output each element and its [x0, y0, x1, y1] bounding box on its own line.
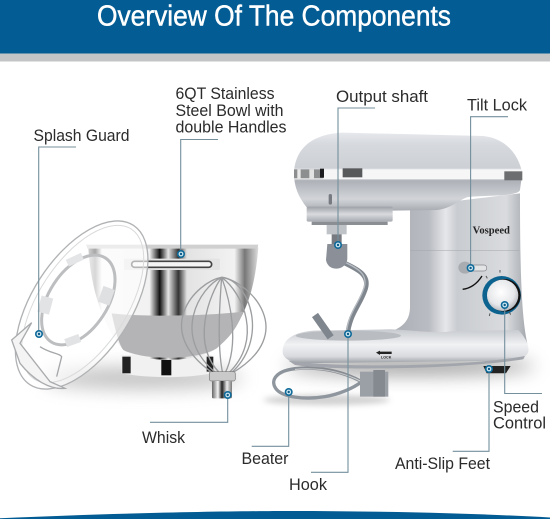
beater connector: [360, 370, 388, 397]
callout: whisk: [142, 391, 232, 447]
beater loop: [274, 368, 362, 398]
bowl lower reflection: [112, 312, 243, 358]
whisk illustration: [182, 277, 266, 398]
whisk shaft: [212, 381, 232, 398]
label: Tilt Lock: [467, 97, 528, 115]
anti-slip foot: [483, 366, 511, 373]
bowl handle: [124, 259, 220, 270]
title: Overview Of The Components: [97, 0, 451, 32]
beater illustration: [263, 368, 390, 405]
stainless steel bowl illustration: [86, 245, 258, 377]
label: Anti-Slip Feet: [395, 455, 490, 473]
header band: [0, 0, 550, 62]
label: Hook: [289, 476, 328, 494]
speed dial: [482, 270, 521, 316]
guard lid shape: [0, 198, 175, 412]
bowl rim: [86, 245, 258, 249]
dough hook: [315, 259, 366, 337]
label: double Handles: [176, 118, 286, 136]
callout: tilt lock: [467, 97, 528, 272]
whisk hub: [209, 372, 235, 381]
lock mark: LOCK: [381, 355, 392, 359]
mixer base shadow: [285, 357, 535, 375]
mixer head: [294, 133, 522, 211]
beater shadow: [263, 395, 390, 405]
head slot: [329, 194, 332, 205]
callout: bowl: [176, 85, 286, 258]
bowl shadow: [43, 367, 243, 389]
label: Beater: [242, 450, 289, 468]
brand name: Vospeed: [473, 225, 510, 236]
label: Whisk: [142, 429, 186, 447]
bowl feet ring: [122, 355, 212, 377]
hook hub: [326, 244, 347, 269]
bowl recess: [296, 331, 401, 341]
attachment hub: [307, 207, 393, 222]
tilt lock lever: [458, 262, 487, 289]
splash guard illustration: [0, 198, 175, 412]
label: Control: [493, 415, 546, 433]
callout: hook: [289, 330, 352, 494]
label: Splash Guard: [34, 127, 130, 145]
callout: speed control: [493, 301, 546, 433]
label: Speed: [493, 399, 539, 417]
callout: anti-slip feet: [395, 365, 493, 473]
chrome band: [294, 168, 522, 180]
callout: beater: [242, 388, 293, 468]
lock mark: [376, 351, 392, 359]
label: Steel Bowl with: [176, 102, 284, 120]
label: 6QT Stainless: [176, 85, 274, 103]
bottom blue arc: [0, 511, 550, 519]
label: Output shaft: [336, 88, 428, 106]
shaft: [327, 225, 347, 234]
mixer column: [387, 193, 527, 343]
stand mixer illustration: [283, 133, 528, 397]
callout: output shaft: [334, 88, 428, 249]
whisk wires: [182, 277, 266, 374]
bowl body: [88, 247, 258, 360]
callout: splash guard: [34, 127, 130, 338]
mixer base: [283, 329, 528, 363]
